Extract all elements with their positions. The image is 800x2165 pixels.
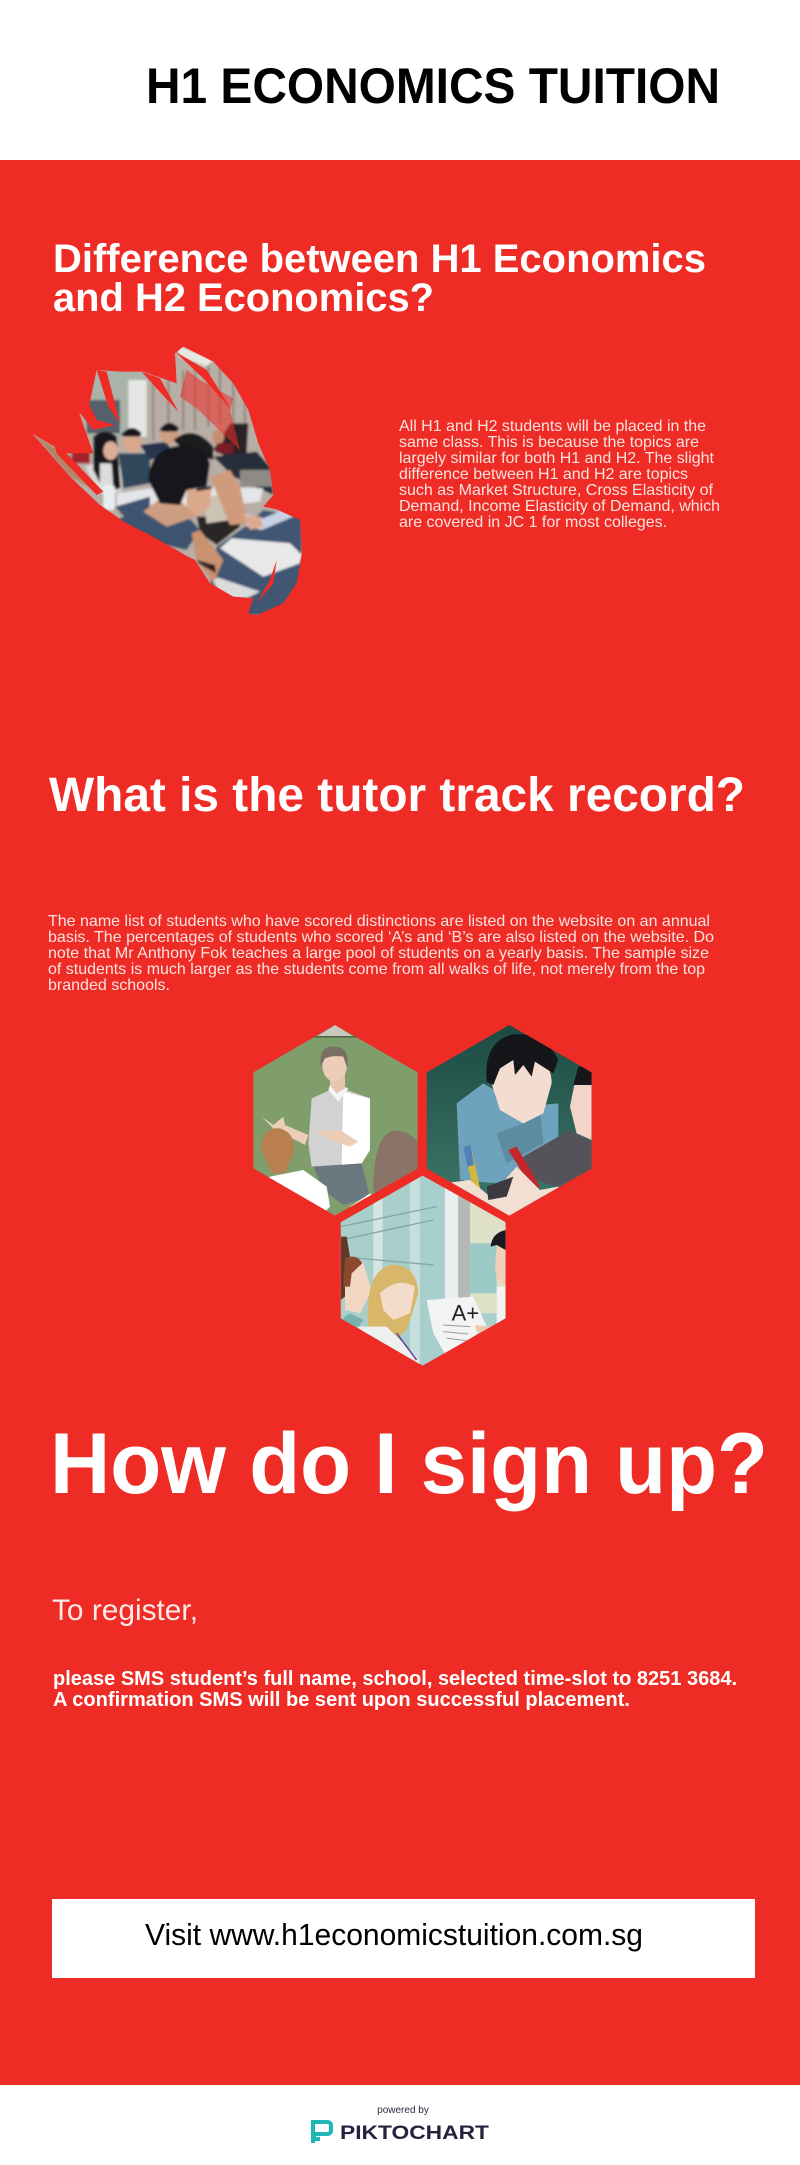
text block: H1 and H2 explanation: same class. This is because the topics are [399,434,699,451]
hexagon: students writing [425,1023,595,1217]
website call-to-action box [52,1899,755,1978]
text block: registration instructions: A confirmation SMS will be sent upon successful placement. [53,1689,630,1711]
hexagon: teacher presenting [250,1023,420,1217]
text block: H1 and H2 explanation: such as Market Structure, Cross Elasticity of [399,482,714,499]
hexagon illustrations [250,1023,595,1367]
text block: track record [48,913,714,994]
text block: H1 and H2 explanation: All H1 and H2 students will be placed in the [399,418,706,435]
text block: track record: of students is much larger as the students come from all walks of life, not merely from the top [48,961,705,978]
white header band [0,0,800,160]
text block: track record: The name list of students who have scored distinctions are listed on the website on an annual [48,913,710,930]
text: to register: To register, [52,1594,198,1627]
heading: difference between H1 and H2: Difference between H1 Economics [53,237,706,281]
hexagon: students with A+ paper: A+ [452,1301,479,1326]
icon: Piktochart logo [313,2122,331,2143]
text block: H1 and H2 explanation [399,418,720,531]
text block: track record: branded schools. [48,977,170,994]
red brush slashes over photo [53,352,277,603]
text block: H1 and H2 explanation: difference between H1 and H2 are topics [399,466,688,483]
text block: registration instructions [53,1668,737,1711]
heading: tutor track record: What is the tutor track record? [49,769,745,822]
footer: powered by Piktochart: powered by [377,2105,429,2116]
photo: students in class in brush-stroke mask [30,343,307,620]
heading: difference between H1 and H2: and H2 Economics? [53,276,434,320]
text block: H1 and H2 explanation: largely similar for both H1 and H2. The slight [399,450,715,467]
text block: H1 and H2 explanation: Demand, Income Elasticity of Demand, which [399,498,720,515]
website call-to-action box: Visit www.h1economicstuition.com.sg [145,1917,643,1952]
hexagon: students with A+ paper [338,1173,508,1367]
footer: powered by Piktochart: PIKTOCHART [340,2123,489,2144]
footer: powered by Piktochart [0,2085,800,2165]
title: H1 ECONOMICS TUITION [146,58,720,114]
text block: registration instructions: please SMS student’s full name, school, selected time-slot to 8251 3684. [53,1668,737,1690]
text block: track record: note that Mr Anthony Fok teaches a large pool of students on a yearly basis. The sample size [48,945,709,962]
text block: track record: basis. The percentages of students who scored ‘A’s and ‘B’s are also listed on the website. Do [48,929,714,946]
heading: difference between H1 and H2 [53,237,706,320]
heading: how do I sign up: How do I sign up? [50,1416,768,1512]
text block: H1 and H2 explanation: are covered in JC 1 for most colleges. [399,514,667,531]
